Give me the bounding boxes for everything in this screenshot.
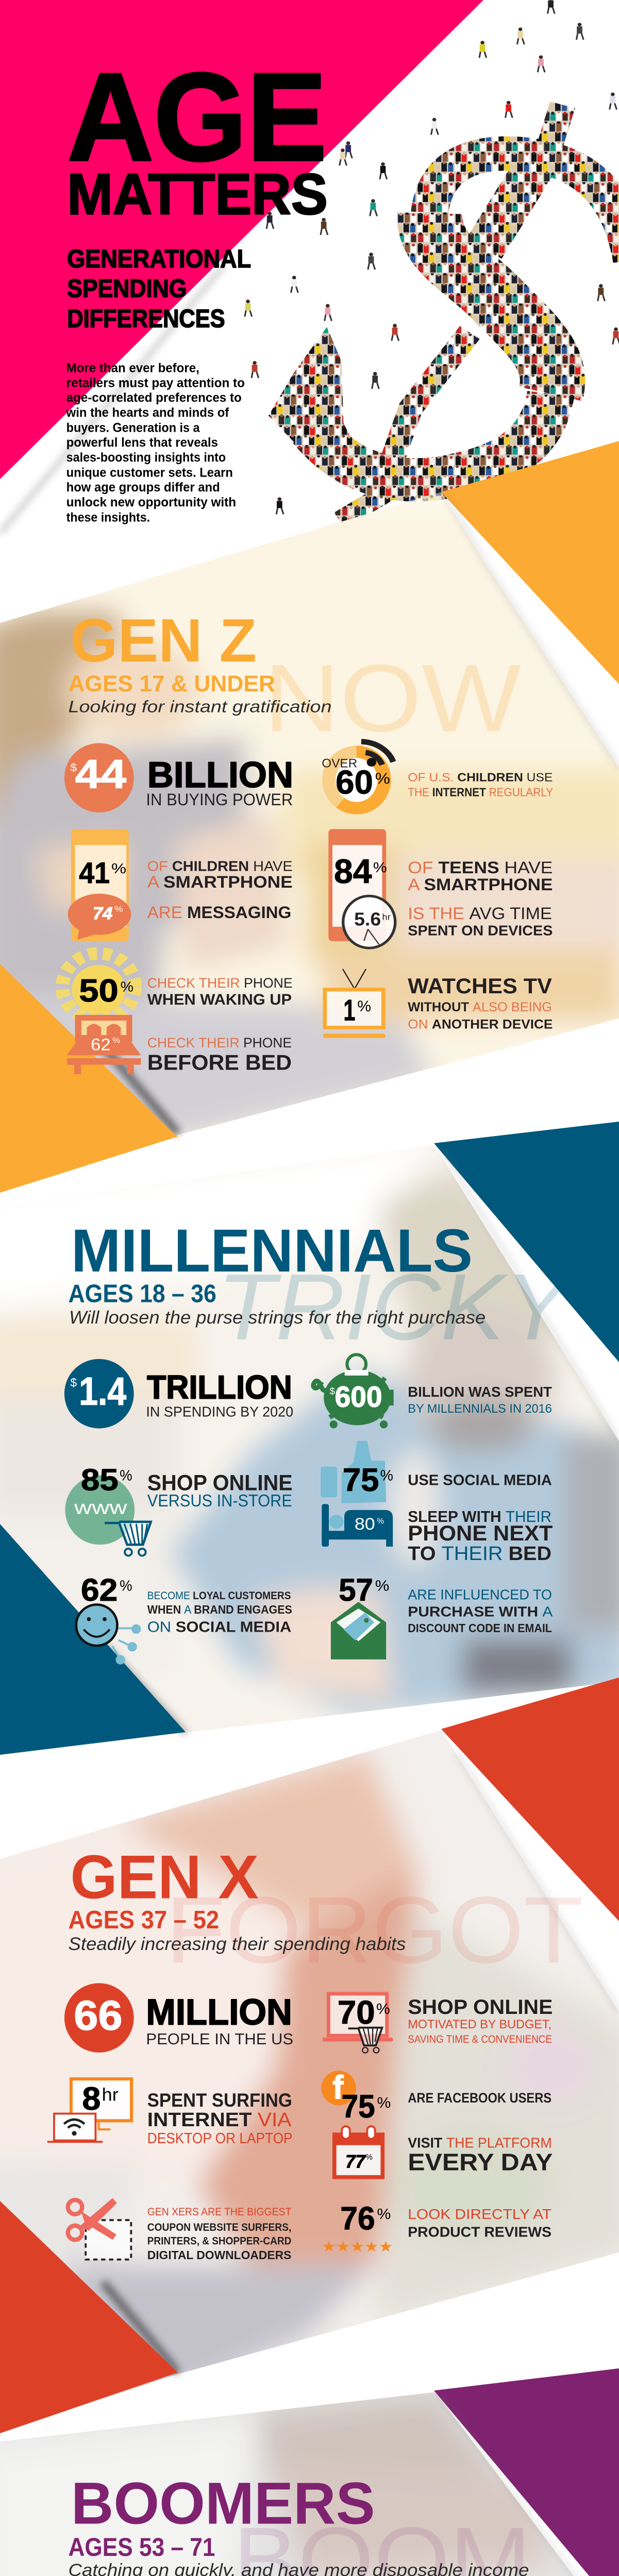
icon: circle <box>64 1359 134 1428</box>
shape: blue bottom-left <box>0 1524 186 1755</box>
icon: phone and clock <box>328 829 395 948</box>
shape: orange bottom-left <box>0 964 178 1193</box>
stat: 66 million: MILLION <box>146 1992 292 2032</box>
fold shadow <box>446 495 619 767</box>
intro paragraph: how age groups differ and <box>66 480 220 495</box>
intro paragraph: sales-boosting insights into <box>66 450 226 465</box>
stat: 62 percent loyal: 62 <box>81 1572 118 1607</box>
heading: boomers: BOOMERS <box>71 2471 375 2537</box>
stat: coupon surfers: GEN XERS ARE THE BIGGEST <box>147 2206 291 2218</box>
stat: 1 percent tv: % <box>357 997 371 1015</box>
icon: circle <box>64 1983 134 2053</box>
stat: coupon surfers: PRINTERS, & SHOPPER-CARD <box>147 2235 291 2247</box>
stat: 62 percent loyal: BECOME LOYAL CUSTOMERS <box>147 1589 291 1602</box>
stat: 62 percent loyal: % <box>120 1578 132 1595</box>
fold shadow <box>103 1643 186 1734</box>
panel: boomers content <box>64 2471 554 2576</box>
stat: 57 percent discount <box>331 1572 553 1659</box>
stat: 44 billion: BILLION <box>147 755 293 795</box>
heading: gen z: GEN Z <box>70 606 257 675</box>
stat: 62 percent loyal <box>76 1572 292 1665</box>
intro paragraph: buyers. Generation is a <box>66 420 200 435</box>
icon: monitor and laptop <box>47 2079 131 2143</box>
stat: 62 percent before bed: BEFORE BED <box>147 1050 292 1075</box>
icon: smiley with nodes <box>76 1605 141 1665</box>
fold shadow <box>103 1046 178 1133</box>
stat: 70 percent shop online: MOTIVATED BY BUDGET, <box>408 2018 551 2031</box>
panel: millennials background photo <box>0 1133 619 1764</box>
tagline: Looking for instant gratification <box>69 698 331 716</box>
tagline: Steadily increasing their spending habits <box>69 1934 406 1954</box>
stat: 85 percent shop online <box>65 1463 293 1556</box>
stat: 600 billion: $ <box>330 1386 335 1397</box>
stat: 80 percent sleep: TO THEIR BED <box>408 1543 551 1565</box>
icon: circle <box>64 743 134 812</box>
stat: 76 percent reviews: PRODUCT REVIEWS <box>408 2224 551 2240</box>
panel: millennials content <box>64 1216 575 1665</box>
stat: 85 percent shop online: % <box>120 1467 132 1484</box>
stat: 60 percent internet: OF U.S. CHILDREN USE <box>408 771 553 784</box>
stat: 70 percent shop online: % <box>376 2001 390 2018</box>
stat: 50 percent waking up <box>62 954 293 1020</box>
subtitle: DIFFERENCES <box>67 304 225 332</box>
stat: 85 percent shop online: VERSUS IN-STORE <box>147 1492 292 1511</box>
stat: 57 percent discount: ARE INFLUENCED TO <box>408 1587 552 1603</box>
stat: 57 percent discount: 57 <box>339 1572 373 1607</box>
stat: 85 percent shop online: SHOP ONLINE <box>147 1471 293 1496</box>
stat: 62 percent loyal: WHEN A BRAND ENGAGES <box>147 1603 292 1616</box>
stat: 84 percent teens: IS THE AVG TIME <box>408 904 552 923</box>
stat: 62 percent before bed: % <box>112 1036 120 1045</box>
icon: bed <box>67 1015 141 1074</box>
icon: www and cart: www <box>74 1497 127 1518</box>
icon: scissors and coupon <box>68 2198 131 2260</box>
tagline: Will loosen the purse strings for the right purchase <box>69 1308 486 1328</box>
icon: laptop with cart <box>323 1994 393 2053</box>
stat: 75 percent facebook: f <box>332 2069 344 2106</box>
stat: 600 billion <box>313 1354 552 1428</box>
stat: 62 percent before bed <box>67 1015 292 1075</box>
stat: 75 percent facebook: ARE FACEBOOK USERS <box>408 2090 551 2106</box>
scattered people <box>245 0 619 514</box>
intro paragraph: these insights. <box>66 510 150 524</box>
stat: 44 billion: 44 <box>75 752 126 797</box>
icon: five stars: ★★★★★ <box>322 2238 393 2255</box>
stat: 76 percent reviews: % <box>377 2206 391 2223</box>
stat: 44 billion: $ <box>70 761 77 774</box>
stat: 66 million: PEOPLE IN THE US <box>146 2030 293 2048</box>
title <box>66 47 328 524</box>
stat: 75 percent social media: % <box>380 1467 393 1484</box>
stat: 41 percent smartphone: 41 <box>79 856 110 889</box>
title: age: AGE <box>67 47 327 187</box>
stat: 41 percent smartphone: A SMARTPHONE <box>147 873 293 892</box>
icon: calendar <box>332 2126 384 2179</box>
stat: 70 percent shop online: SHOP ONLINE <box>408 1996 553 2019</box>
stat: 44 billion: IN BUYING POWER <box>146 790 293 809</box>
stat: 75 percent facebook: % <box>377 2095 391 2111</box>
stat: 60 percent internet: OVER <box>322 756 357 770</box>
stat: 1 percent tv: ON ANOTHER DEVICE <box>408 1017 553 1031</box>
stat: 80 percent sleep: % <box>377 1517 384 1526</box>
stat: 60 percent internet: 60 <box>336 764 373 801</box>
panel: gen z content <box>62 606 553 1075</box>
stat: 50 percent waking up: CHECK THEIR PHONE <box>147 975 293 991</box>
panel: hero <box>0 0 619 533</box>
watermark: tricky: TRICKY <box>217 1255 575 1359</box>
stat: 77 percent every day <box>332 2126 553 2179</box>
stat: 600 billion: BILLION WAS SPENT <box>408 1384 552 1400</box>
stat: 1 percent tv: WITHOUT ALSO BEING <box>408 999 552 1014</box>
intro paragraph: age-correlated preferences to <box>66 390 242 405</box>
stat: 80 percent sleep: 80 <box>355 1515 375 1533</box>
panel: gen x content <box>47 1843 583 2262</box>
intro paragraph: More than ever before, <box>66 361 199 375</box>
stat: 80 percent sleep <box>322 1504 553 1565</box>
stat: 1 percent tv: 1 <box>343 993 355 1027</box>
stat: 41 percent smartphone: % <box>111 860 126 877</box>
icon: piggy bank <box>313 1354 394 1428</box>
stat: 62 percent before bed: CHECK THEIR PHONE <box>147 1035 292 1050</box>
stat: 8 hours surfing: 8 <box>82 2081 101 2117</box>
stat: 85 percent shop online: 85 <box>81 1463 119 1497</box>
icon: tv <box>323 969 386 1038</box>
stat: 60 percent internet <box>322 742 553 808</box>
icon: bed <box>322 1504 393 1547</box>
subtitle: GENERATIONAL <box>67 244 251 273</box>
stat: 1 percent tv: WATCHES TV <box>408 974 552 998</box>
stat: 1.4 trillion: $ <box>70 1376 77 1389</box>
stat: 50 percent waking up: WHEN WAKING UP <box>147 991 292 1008</box>
fold shadow <box>0 264 225 533</box>
stat: 1.4 trillion: 1.4 <box>79 1370 126 1414</box>
fold shadow <box>438 2393 619 2576</box>
stat: 84 percent teens <box>328 829 553 948</box>
heading: ages: AGES 37 – 52 <box>69 1906 219 1934</box>
icon: envelope with tag <box>331 1602 386 1659</box>
stat: 8 hours surfing: INTERNET VIA <box>147 2109 292 2131</box>
stat: 84 percent teens: hr <box>382 912 391 922</box>
panel: gen x background photo <box>0 1712 619 2422</box>
heading: ages: AGES 17 & UNDER <box>69 670 275 697</box>
stat: 50 percent waking up: 50 <box>79 973 119 1008</box>
stat: 44 billion <box>64 743 293 812</box>
shape: purple top-right <box>434 2368 619 2576</box>
shape: orange top-right <box>441 441 619 684</box>
crowd dollar sign <box>269 105 619 520</box>
stat: 77 percent every day: % <box>365 2153 373 2162</box>
stat: 41 percent smartphone: ARE MESSAGING <box>147 903 291 922</box>
stat: 80 percent sleep: SLEEP WITH THEIR <box>408 1508 551 1526</box>
intro paragraph <box>66 361 245 524</box>
stat: 77 percent every day: VISIT THE PLATFORM <box>408 2134 552 2150</box>
stat: coupon surfers: COUPON WEBSITE SURFERS, <box>147 2221 291 2233</box>
stat: 57 percent discount: % <box>375 1578 389 1595</box>
intro paragraph: unlock new opportunity with <box>66 495 236 510</box>
icon: www and cart <box>65 1476 151 1556</box>
stat: 62 percent before bed: 62 <box>91 1036 110 1054</box>
stat: 77 percent every day: 77 <box>345 2151 366 2172</box>
stat: 70 percent shop online: SAVING TIME & CONVENIENCE <box>408 2033 552 2045</box>
stat: 77 percent every day: EVERY DAY <box>408 2149 553 2176</box>
title: matters: MATTERS <box>67 162 328 226</box>
pink diagonal panel <box>0 0 483 479</box>
stat: 84 percent teens: 5.6 <box>354 909 381 930</box>
stat: 84 percent teens: A SMARTPHONE <box>408 875 553 894</box>
stat: 76 percent reviews: LOOK DIRECTLY AT <box>408 2206 551 2222</box>
subtitle: SPENDING <box>67 274 187 302</box>
stat: 76 percent reviews <box>322 2201 551 2255</box>
stat: 62 percent loyal: ON SOCIAL MEDIA <box>147 1619 291 1635</box>
watermark: now: NOW <box>264 645 521 752</box>
stat: 57 percent discount: DISCOUNT CODE IN EMAIL <box>408 1621 552 1635</box>
heading: millennials: MILLENNIALS <box>71 1216 473 1284</box>
subtitle <box>67 244 251 332</box>
stat: 76 percent reviews: 76 <box>340 2201 375 2237</box>
stat: 8 hours surfing <box>47 2079 293 2147</box>
icon: sun <box>62 954 135 1020</box>
stat: 60 percent internet: THE INTERNET REGULARLY <box>408 786 553 799</box>
panel: boomers background photo <box>0 2392 574 2576</box>
intro paragraph: unique customer sets. Learn <box>66 465 233 480</box>
icon: thumbs up <box>321 1441 386 1503</box>
stat: 8 hours surfing: hr <box>102 2084 119 2105</box>
stat: 8 hours surfing: SPENT SURFING <box>147 2090 292 2111</box>
stat: 75 percent social media: USE SOCIAL MEDIA <box>408 1472 552 1489</box>
shape: red bottom-left <box>0 2201 178 2433</box>
stat: 84 percent teens: 84 <box>334 853 372 890</box>
stat: 8 hours surfing: DESKTOP OR LAPTOP <box>147 2130 293 2147</box>
stat: 70 percent shop online: 70 <box>338 1994 375 2031</box>
stat: 57 percent discount: PURCHASE WITH A <box>408 1604 553 1619</box>
stat: 84 percent teens: OF TEENS HAVE <box>408 858 553 877</box>
stat: 75 percent facebook: 75 <box>342 2089 375 2125</box>
fold shadow <box>103 2282 178 2372</box>
heading: ages: AGES 18 – 36 <box>69 1280 216 1308</box>
stat: 1.4 trillion: IN SPENDING BY 2020 <box>146 1403 293 1419</box>
stat: 600 billion: 600 <box>335 1381 382 1413</box>
intro paragraph: powerful lens that reveals <box>66 435 218 450</box>
fold shadow <box>456 1752 619 2012</box>
stat: 75 percent social media <box>321 1441 552 1503</box>
stat: 75 percent facebook <box>322 2069 551 2125</box>
stat: 41 percent smartphone <box>68 829 293 941</box>
stat: 41 percent smartphone: 74 <box>93 904 112 923</box>
icon: facebook circle <box>322 2071 356 2105</box>
stat: 600 billion: BY MILLENNIALS IN 2016 <box>408 1402 552 1416</box>
shape: red top-right <box>441 1677 619 1921</box>
intro paragraph: win the hearts and minds of <box>66 405 229 420</box>
stat: coupon surfers <box>68 2198 291 2262</box>
stat: 1.4 trillion <box>64 1359 293 1428</box>
stat: 84 percent teens: SPENT ON DEVICES <box>408 923 553 939</box>
stat: 75 percent social media: 75 <box>343 1462 379 1498</box>
heading: ages: AGES 53 – 71 <box>69 2533 215 2562</box>
stat: 66 million <box>64 1983 293 2053</box>
stat: 41 percent smartphone: OF CHILDREN HAVE <box>147 858 293 874</box>
stat: 1.4 trillion: TRILLION <box>147 1368 292 1405</box>
heading: gen x: GEN X <box>70 1843 259 1912</box>
intro paragraph: retailers must pay attention to <box>66 375 245 390</box>
stat: 50 percent waking up: % <box>121 978 133 995</box>
shape: blue top-right <box>434 1122 619 1362</box>
stat: 1 percent tv <box>323 969 553 1038</box>
stat: 66 million: 66 <box>74 1993 122 2039</box>
panel: gen z background photo <box>0 495 619 1181</box>
stat: 80 percent sleep: PHONE NEXT <box>408 1521 553 1545</box>
stat: 70 percent shop online <box>323 1994 553 2053</box>
fold shadow <box>442 1149 619 1441</box>
stat: coupon surfers: DIGITAL DOWNLOADERS <box>147 2248 291 2262</box>
watermark: forgot: FORGOT <box>166 1877 583 1982</box>
icon: donut with wifi <box>329 742 393 808</box>
icon: phone and bubble <box>68 829 131 941</box>
stat: 41 percent smartphone: % <box>114 904 123 914</box>
stat: 84 percent teens: % <box>373 859 387 875</box>
stat: 60 percent internet: % <box>375 770 390 787</box>
